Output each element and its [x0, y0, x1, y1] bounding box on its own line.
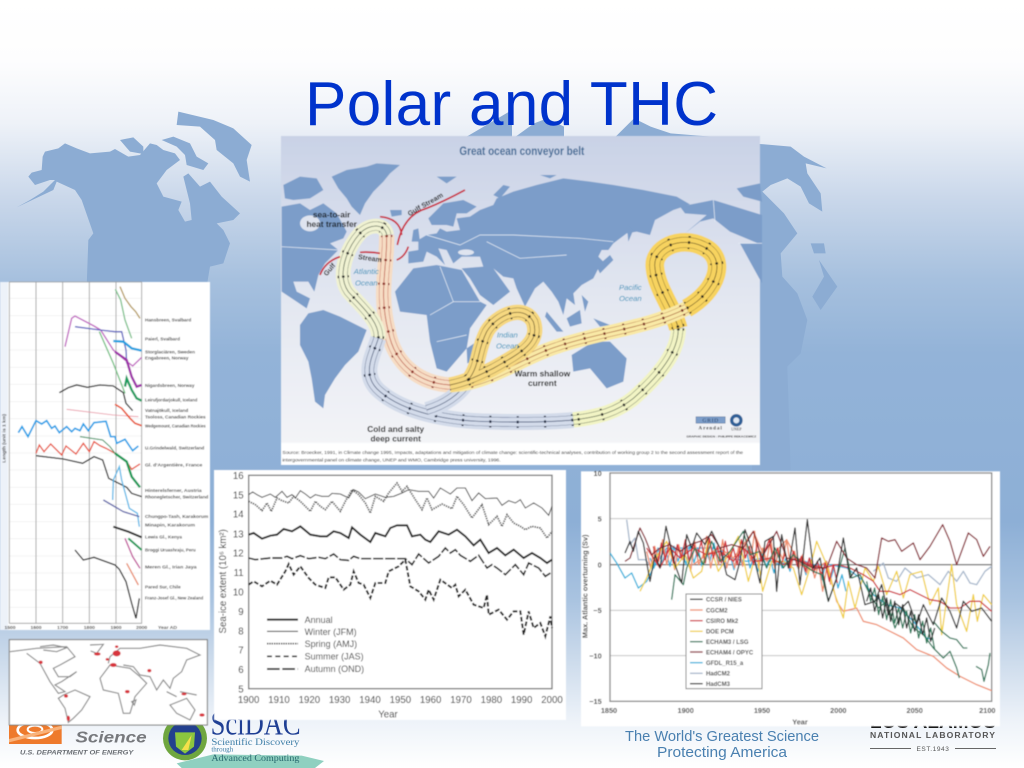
- ribbon: southern cold deep current: [369, 338, 573, 422]
- overturning y labels: −10: [589, 651, 602, 660]
- glacier labels: Vatnajökull, Iceland: [145, 408, 188, 413]
- y axis labels: 9: [238, 607, 244, 618]
- x axis labels: 1920: [299, 695, 320, 706]
- chart frame: [9, 282, 142, 623]
- y axis labels: 14: [233, 510, 244, 521]
- x axis labels: 1990: [511, 695, 532, 706]
- glacier labels: Leirufjordarjokull, Iceland: [145, 398, 197, 403]
- y axis labels: 16: [233, 471, 244, 482]
- ribbon: Indian Ocean loop: [450, 312, 535, 385]
- overturning zero line: [610, 563, 992, 567]
- sea-ice chart frame: [249, 475, 552, 689]
- x axis labels: Sea-ice extent (10⁶ km²): [218, 529, 229, 633]
- x axis labels: 1970: [450, 695, 472, 706]
- logo: SciDAC with DOE seal: Scientific Discovery: [211, 737, 300, 747]
- glacier labels: Pared Sur, Chile: [145, 585, 181, 590]
- chart grid: [9, 298, 142, 607]
- ribbon: warm shallow current: [450, 308, 687, 385]
- logo: Office of Science: [9, 722, 147, 756]
- panel: glacier length chart: [0, 282, 210, 631]
- x axis labels: 2000: [541, 695, 563, 706]
- glacier labels: Rhonegletscher, Switzerland: [145, 495, 208, 500]
- overturning y labels: 5: [598, 514, 602, 523]
- overturning legend: GFDL_R15_a: [706, 661, 744, 667]
- overturning x labels: Year: [792, 718, 808, 727]
- overturning x labels: 1950: [754, 706, 770, 715]
- overturning model lines: [610, 520, 992, 691]
- map labels: [306, 192, 571, 444]
- glacier labels: Nigardsbreen, Norway: [145, 383, 195, 388]
- ocean labels: Indian: [497, 331, 518, 340]
- panel: Atlantic overturning chart: [580, 469, 1000, 727]
- map labels: Warm shallow: [514, 369, 571, 379]
- logos: GRID Arendal and UNEP: [686, 414, 757, 438]
- map labels: heat transfer: [306, 219, 358, 229]
- glacier axis labels: 2000: [136, 625, 147, 631]
- series: spring: [249, 483, 552, 538]
- y axis labels: 8: [238, 626, 244, 637]
- x axis labels: Year: [378, 710, 399, 721]
- overturning legend: CSIRO Mk2: [706, 619, 739, 625]
- logo: Los Alamos National Laboratory: EST.1943: [916, 746, 950, 753]
- series: winter: [249, 488, 552, 515]
- ocean labels: Ocean: [496, 342, 519, 351]
- panel: sea-ice extent chart: [214, 470, 566, 721]
- overturning legend: ECHAM3 / LSG: [706, 640, 749, 646]
- overturning x labels: 2050: [907, 706, 923, 715]
- logo: Office of Science: Science: [75, 730, 147, 747]
- glacier axis labels: 1800: [84, 625, 95, 631]
- glacier labels: Engabreen, Norway: [145, 356, 189, 361]
- logo: SciDAC with DOE seal: SciDAC: [211, 705, 301, 742]
- sea-ice legend: Summer (JAS): [305, 651, 364, 661]
- sea-ice legend: Annual: [305, 615, 333, 625]
- glacier axis labels: 1500: [4, 625, 16, 631]
- overturning x labels: 2000: [830, 706, 846, 715]
- overturning legend: CCSR / NIES: [706, 598, 742, 604]
- y axis labels: 11: [234, 568, 244, 579]
- glacier labels: Tsoloss, Canadian Rockies: [145, 414, 206, 419]
- ribbon: conveyor currents: [343, 226, 717, 422]
- map source caption: intergovernmental panel on climate change, UNEP and WMO, Cambridge press university, 1996.: [282, 457, 501, 462]
- overturning y labels: [589, 469, 602, 706]
- glacier axis labels: 1700: [57, 625, 68, 631]
- map labels: sea-to-air: [313, 210, 351, 220]
- logo: SciDAC with DOE seal: Advanced Computing: [211, 753, 300, 763]
- map labels: deep current: [370, 434, 421, 444]
- glacier axis labels: [1, 414, 177, 631]
- x axis labels: 1910: [268, 695, 290, 706]
- overturning legend: [686, 594, 762, 689]
- x axis labels: 1900: [238, 695, 259, 706]
- x axis labels: 1930: [329, 695, 350, 706]
- panel: glacier locations world map: [9, 640, 207, 725]
- panel: great ocean conveyor belt map: [281, 136, 762, 465]
- map labels: current: [528, 378, 557, 388]
- logo: Office of Science: U.S. DEPARTMENT OF ENERGY: [20, 750, 135, 756]
- overturning y labels: 0: [598, 560, 602, 569]
- ribbon: Pacific loop: [655, 242, 717, 328]
- glacier labels: Chungpo-Tash, Karakorum: [145, 514, 208, 519]
- overturning x labels: 1850: [601, 706, 617, 715]
- glacier labels: [145, 317, 208, 600]
- logos: GRID Arendal and UNEP: GRID: [702, 418, 719, 424]
- map inland seas: [300, 215, 474, 255]
- y axis labels: 10: [233, 587, 244, 598]
- logo: SciDAC with DOE seal: [163, 705, 324, 768]
- y axis labels: 12: [233, 549, 244, 560]
- overturning legend: DOE PCM: [706, 630, 734, 636]
- logo: SciDAC with DOE seal: through: [211, 746, 234, 754]
- overturning x labels: 2100: [979, 706, 995, 715]
- series: annual: [249, 525, 552, 563]
- ocean labels: Pacific: [619, 283, 642, 292]
- x axis labels: 1960: [420, 695, 441, 706]
- glacier labels: Paierl, Svalbard: [145, 336, 180, 341]
- logos: GRID Arendal and UNEP: GRAPHIC DESIGN : PHILIPPE REKACEWICZ: [686, 434, 757, 438]
- arrows: Gulf Stream: [320, 190, 465, 275]
- tagline: [625, 728, 819, 761]
- map labels: Gulf: [323, 262, 338, 278]
- glacier location markers: [39, 645, 205, 721]
- ribbon: Atlantic return current: [343, 226, 387, 338]
- glacier labels: Lewis Gl., Kenya: [145, 534, 182, 539]
- sea-ice legend: Winter (JFM): [305, 627, 357, 637]
- glacier axis labels: 1600: [30, 625, 42, 631]
- overturning legend: HadCM3: [706, 682, 731, 688]
- world outlines: [10, 644, 200, 722]
- glacier lines: [18, 287, 142, 618]
- ocean labels: Ocean: [355, 278, 378, 287]
- x axis labels: 1950: [390, 695, 411, 706]
- map country borders: [282, 200, 762, 342]
- overturning legend: CGCM2: [706, 608, 728, 614]
- series: summer: [249, 560, 552, 636]
- x axis labels: [218, 529, 563, 721]
- overturning x labels: 1900: [678, 706, 694, 715]
- logos: GRID Arendal and UNEP: UNEP: [731, 426, 742, 431]
- tagline: Protecting America: [657, 744, 788, 761]
- title: Polar and THC: [305, 70, 718, 139]
- overturning legend: ECHAM4 / OPYC: [706, 650, 754, 656]
- map landmasses: [282, 163, 762, 408]
- ribbon: Atlantic warm current: [384, 235, 450, 385]
- y axis labels: 15: [233, 490, 244, 501]
- map heading: Great ocean conveyor belt: [459, 144, 584, 158]
- glacier labels: Broggi Uruashraju, Peru: [145, 547, 196, 552]
- overturning legend: HadCM2: [706, 672, 731, 678]
- y axis labels: 7: [238, 646, 244, 657]
- map labels: Gulf Stream: [407, 192, 445, 218]
- logos: GRID Arendal and UNEP: Arendal: [698, 427, 723, 432]
- overturning grid: [610, 519, 992, 656]
- glacier labels: U.Grindelwald, Switzerland: [145, 446, 204, 451]
- glacier axis labels: Year AD: [158, 625, 177, 631]
- map source caption: Source: Broecker, 1991, in Climate change 1995, Impacts, adaptations and mitigation of climate change: scientific-technical analyses, contribution of working group 2 to the second assessment report of the: [282, 450, 743, 455]
- glacier labels: Storglaciären, Sweden: [145, 349, 195, 354]
- overturning y labels: −5: [593, 606, 602, 615]
- y axis labels: 6: [238, 665, 244, 676]
- map labels: Cold and salty: [367, 424, 424, 434]
- y axis labels: [233, 471, 244, 695]
- overturning y labels: −15: [589, 697, 602, 706]
- series: autumn: [249, 548, 552, 576]
- ocean labels: [353, 267, 642, 351]
- map labels: Stream: [358, 254, 382, 264]
- overturning x labels: Max. Atlantic overturning (Sv): [580, 534, 589, 638]
- overturning frame: [610, 473, 992, 701]
- glacier labels: Meren Gl., Irian Jaya: [145, 564, 197, 569]
- y axis labels: 5: [238, 684, 244, 695]
- tagline: The World's Greatest Science: [625, 728, 819, 745]
- logo: Los Alamos National Laboratory: [870, 712, 996, 753]
- ocean labels: Atlantic: [353, 267, 379, 276]
- overturning y labels: 10: [594, 469, 602, 478]
- logo: Los Alamos National Laboratory: LOS ALAMOS: [870, 712, 996, 733]
- sea-ice legend: Spring (AMJ): [305, 639, 357, 649]
- glacier labels: Gl. d'Argentière, France: [145, 463, 203, 468]
- sea-ice legend: Autumn (OND): [305, 664, 364, 674]
- overturning x labels: [580, 534, 995, 727]
- glacier axis labels: Length (unit is 1 km): [1, 414, 7, 463]
- ribbon: Pacific rising current: [573, 328, 678, 420]
- logo: Los Alamos National Laboratory: NATIONAL LABORATORY: [870, 730, 995, 740]
- glacier labels: Hinterelsferner, Austria: [145, 488, 202, 493]
- sea-ice legend: [267, 615, 364, 674]
- glacier labels: Minapin, Karakorum: [145, 522, 195, 527]
- x axis labels: 1940: [359, 695, 381, 706]
- glacier axis labels: 1900: [110, 625, 122, 631]
- map source caption: [282, 450, 743, 462]
- x axis labels: 1980: [481, 695, 502, 706]
- glacier labels: Hansbreen, Svalbard: [145, 317, 191, 322]
- background world map: [17, 110, 837, 470]
- ocean labels: Ocean: [619, 294, 642, 303]
- y axis labels: 13: [233, 529, 244, 540]
- glacier labels: Wedgemount, Canadian Rockies: [145, 423, 206, 428]
- glacier labels: Franz-Josef Gl., New Zealand: [145, 595, 203, 600]
